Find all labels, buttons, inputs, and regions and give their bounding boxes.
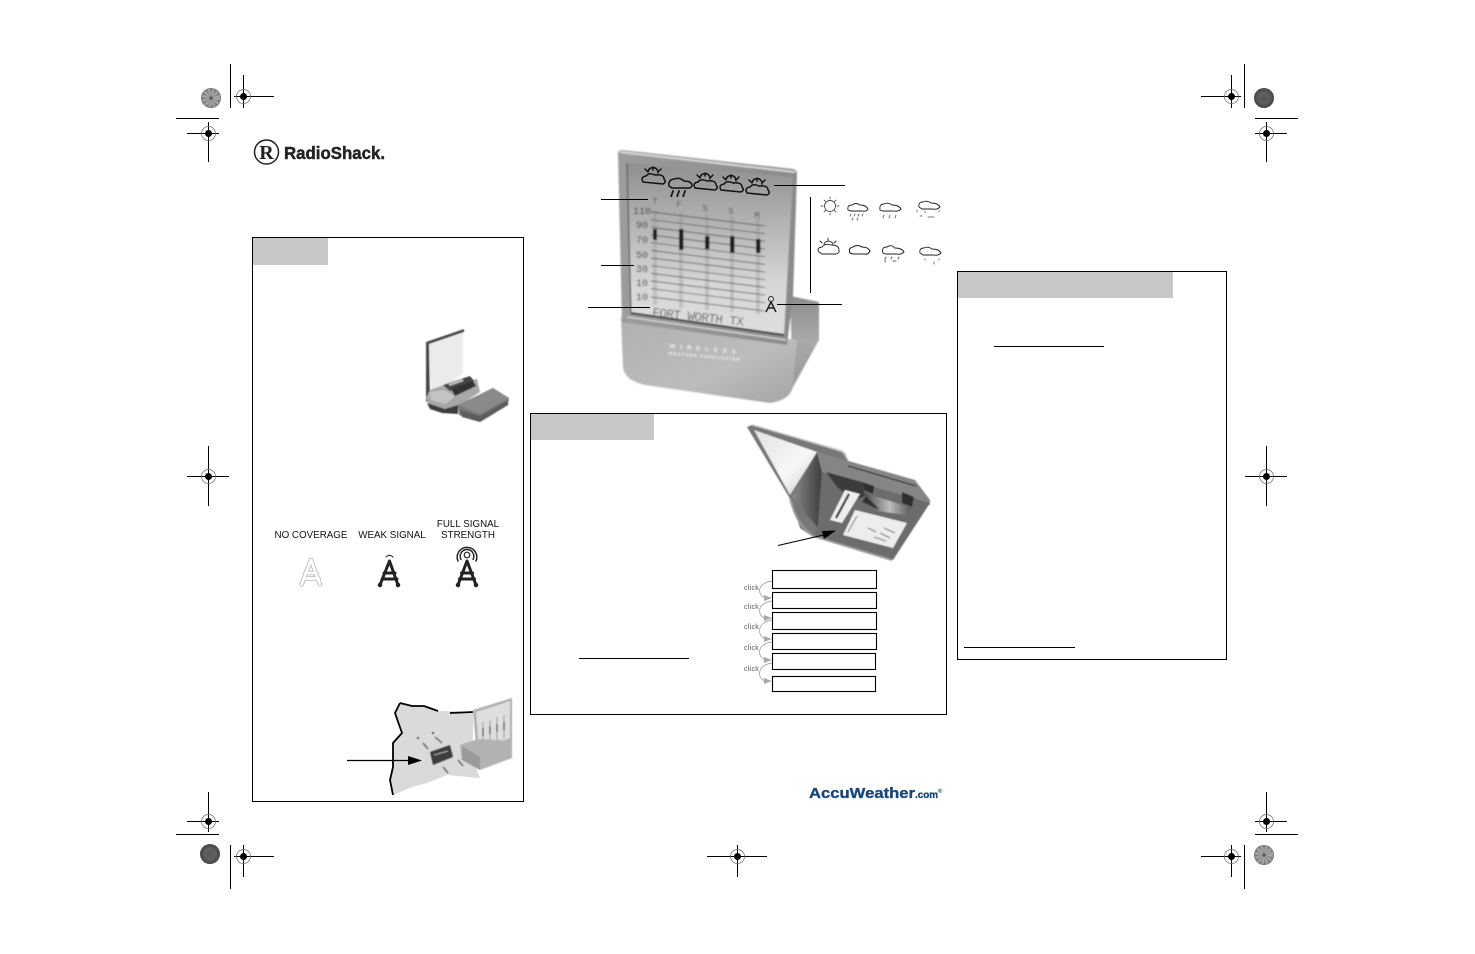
chart bars: [653, 229, 760, 253]
panel heading bar: [958, 272, 1173, 298]
brand text: [668, 344, 742, 362]
chart grid: [651, 212, 765, 311]
AccuWeather logo: AccuWeather: [809, 785, 915, 802]
scale labels: 90: [636, 221, 648, 232]
label: full signal strength: FULL SIGNAL: [437, 519, 500, 530]
AccuWeather logo: .com: [915, 790, 938, 801]
panel heading bar: [253, 238, 328, 265]
day labels: S: [702, 204, 708, 214]
display wedge: [747, 425, 848, 537]
icon: rain and snow: [848, 204, 868, 220]
panel: middle: [530, 414, 946, 714]
arrow: reset button: [778, 530, 836, 546]
scale labels: 10: [636, 293, 648, 304]
signal legend: [275, 519, 500, 586]
device screen: [627, 163, 793, 335]
photo: battery compartment: [426, 329, 509, 422]
colour registration discs: [200, 88, 1274, 865]
scale labels: 70: [636, 236, 648, 247]
icon: tower no coverage: [302, 560, 320, 584]
battery recess: [826, 472, 865, 500]
callout lines: [588, 186, 845, 308]
photo: wall mount: [347, 698, 512, 795]
click labels: [744, 585, 759, 673]
scale labels: 30: [636, 265, 648, 276]
day labels: M: [754, 211, 760, 221]
RadioShack logo: R: [259, 142, 274, 164]
photo: device rear: [747, 425, 930, 560]
device frame: [618, 150, 797, 345]
device pedestal: [790, 296, 819, 387]
RadioShack logo: RadioShack.: [284, 143, 385, 163]
icon: flurries: [920, 247, 941, 264]
brand text: WEATHER FORECASTER: [668, 351, 741, 362]
scale labels: 110: [633, 207, 651, 218]
day labels: F: [676, 200, 682, 210]
arrow: [347, 756, 422, 765]
click labels: click: [744, 645, 759, 652]
icon: snow: [917, 201, 940, 217]
device: weather forecaster: [618, 150, 819, 403]
body side: [792, 452, 822, 528]
weather icon legend: [818, 197, 941, 264]
chart columns: [655, 210, 758, 314]
AccuWeather logo: ®: [938, 788, 943, 795]
click arrows: [760, 581, 772, 684]
LCD forecast icons: [642, 167, 769, 197]
link underlines: [964, 346, 1104, 648]
panel heading bar: [531, 414, 654, 440]
location text: FORT WORTH TX: [652, 306, 745, 330]
click labels: click: [744, 666, 759, 673]
mode sequence boxes: [772, 570, 876, 692]
panel: left: [252, 238, 524, 802]
brand text: WIRELESS: [669, 344, 741, 356]
icon: LCD tower: [766, 296, 776, 312]
device base: [621, 317, 797, 403]
day labels: [652, 197, 760, 221]
icon: tower weak signal: [378, 555, 400, 586]
icon: cloudy: [849, 246, 870, 254]
icon: rain: [880, 203, 901, 218]
click labels: click: [744, 604, 759, 611]
scale labels: [633, 207, 651, 304]
label: weak signal: WEAK SIGNAL: [358, 530, 426, 541]
click labels: click: [744, 624, 759, 631]
icon: sunny: [821, 197, 839, 215]
link underline: [579, 658, 689, 660]
labels: [830, 490, 860, 523]
label: full signal strength: STRENGTH: [441, 530, 495, 541]
panel: right: [958, 272, 1226, 660]
icon: partly sunny: [818, 238, 839, 254]
RadioShack logo: [254, 140, 385, 164]
day labels: T: [652, 197, 658, 207]
printer marks: [176, 64, 1298, 889]
icon: tower full signal: [456, 547, 478, 586]
day labels: S: [728, 207, 734, 217]
top band: [817, 452, 930, 505]
rear face: [813, 472, 930, 560]
scale labels: 10: [636, 279, 648, 290]
icon: rain and snow showers: [882, 246, 904, 262]
label: no coverage: NO COVERAGE: [275, 530, 348, 541]
scale labels: 50: [636, 251, 648, 262]
click labels: click: [744, 585, 759, 592]
rim: [790, 498, 892, 560]
